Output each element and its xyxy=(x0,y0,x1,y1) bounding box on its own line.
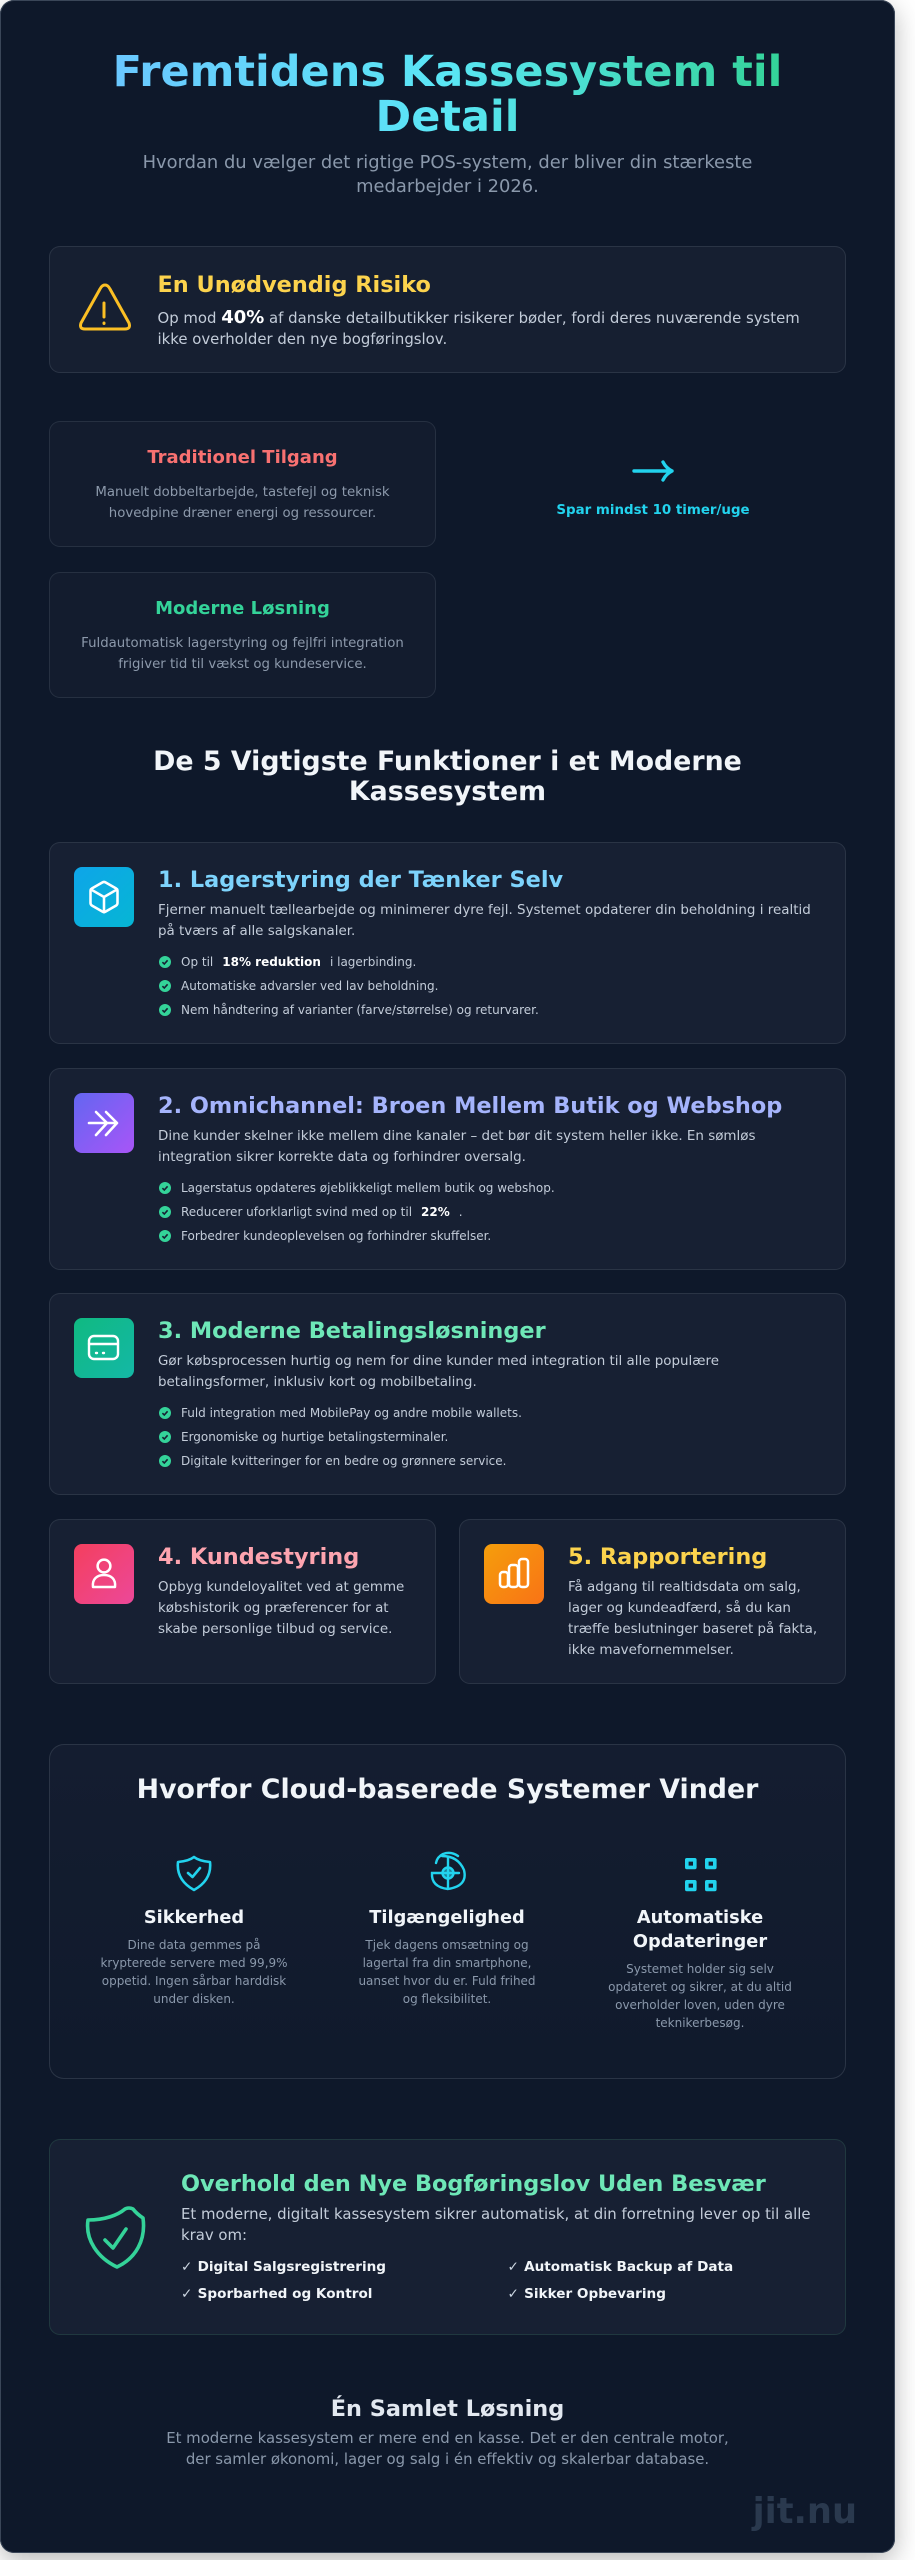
benefit: security text: krypterede servere med 99,9% xyxy=(100,1956,288,1970)
benefit: security text: Dine data gemmes på xyxy=(127,1938,261,1952)
list item: Nem håndtering af varianter (farve/størrelse) og returvarer. xyxy=(181,1003,539,1017)
conclusion text: Et moderne kassesystem er mere end en kasse. Det er den centrale motor, xyxy=(166,2429,729,2447)
benefit: security text: under disken. xyxy=(153,1992,235,2006)
text: Dine kunder skelner ikke mellem dine kanaler – det bør dit system heller ikke. En sømløs xyxy=(158,1129,755,1144)
benefit: security heading: Sikkerhed xyxy=(144,1907,244,1928)
title xyxy=(0,50,895,140)
checkmarks xyxy=(159,956,171,1016)
text xyxy=(158,1580,404,1637)
text: krav om: xyxy=(181,2226,247,2244)
panel: feature 3 xyxy=(49,1293,846,1495)
text: Fjerner manuelt tællearbejde og minimerer dyre fejl. Systemet opdaterer din beholdning i realtid xyxy=(158,903,811,918)
icon: grid xyxy=(685,1858,717,1892)
benefit: updates heading: Automatiske xyxy=(637,1907,763,1928)
subtitle xyxy=(143,152,752,197)
heading: Overhold den Nye Bogføringslov Uden Besvær xyxy=(181,2171,766,2197)
title: Fremtidens Kassesystem til xyxy=(113,47,782,97)
text: på tværs af alle salgskanaler. xyxy=(158,924,355,939)
checklist item: ✓ xyxy=(181,2259,192,2275)
benefit: availability text: og fleksibilitet. xyxy=(403,1992,491,2006)
icon: user xyxy=(74,1544,134,1604)
subtitle: medarbejder i 2026. xyxy=(356,176,539,197)
benefit: updates text: opdateret og sikrer, at du altid xyxy=(608,1980,792,1994)
conclusion heading: Én Samlet Løsning xyxy=(331,2396,564,2422)
checklist item: Digital Salgsregistrering xyxy=(198,2259,386,2275)
panel: traditional approach xyxy=(49,421,436,547)
subtitle: Hvordan du vælger det rigtige POS-system, der bliver din stærkeste xyxy=(143,152,752,173)
text: købshistorik og præferencer for at xyxy=(158,1601,389,1616)
text: Et moderne, digitalt kassesystem sikrer automatisk, at din forretning lever op til alle xyxy=(181,2205,810,2223)
benefit: updates text: Systemet holder sig selv xyxy=(626,1962,774,1976)
text: træffe beslutninger baseret på fakta, xyxy=(568,1622,817,1637)
checklist item: ✓ xyxy=(508,2259,519,2275)
benefit: availability heading: Tilgængelighed xyxy=(369,1907,525,1928)
benefit: updates text xyxy=(608,1962,792,2030)
watermark: jit.nu xyxy=(753,2491,857,2532)
risk text xyxy=(158,307,800,348)
text xyxy=(158,1354,719,1390)
text xyxy=(158,1129,755,1165)
conclusion text xyxy=(166,2429,729,2468)
panel: feature 2 xyxy=(49,1068,846,1270)
icon: remote access xyxy=(430,1852,466,1890)
text: ikke mavefornemmelser. xyxy=(568,1643,734,1658)
icon: box xyxy=(74,867,134,927)
list item: Automatiske advarsler ved lav beholdning. xyxy=(181,979,438,993)
benefit: updates heading xyxy=(633,1907,768,1952)
text: hovedpine dræner energi og ressourcer. xyxy=(109,506,376,521)
icon: shield xyxy=(176,1856,212,1892)
section heading xyxy=(153,746,742,807)
icon: payment card xyxy=(74,1318,134,1378)
text: skabe personlige tilbud og service. xyxy=(158,1622,392,1637)
heading: Hvorfor Cloud-baserede Systemer Vinder xyxy=(137,1774,758,1805)
text xyxy=(181,2205,810,2244)
text: Manuelt dobbeltarbejde, tastefejl og teknisk xyxy=(95,485,390,500)
benefit: availability text: uanset hvor du er. Fuld frihed xyxy=(358,1974,536,1988)
list item: Digitale kvitteringer for en bedre og grønnere service. xyxy=(181,1454,506,1468)
panel: feature 1 xyxy=(49,842,846,1044)
title: Detail xyxy=(376,92,519,142)
section heading: Kassesystem xyxy=(349,776,546,807)
benefit: availability text: Tjek dagens omsætning og xyxy=(365,1938,529,1952)
heading: 2. Omnichannel: Broen Mellem Butik og Webshop xyxy=(158,1093,782,1119)
benefit: security text xyxy=(100,1938,288,2006)
panel: compliance xyxy=(49,2139,846,2335)
heading: 1. Lagerstyring der Tænker Selv xyxy=(158,867,563,893)
list item: Forbedrer kundeoplevelsen og forhindrer skuffelser. xyxy=(181,1229,491,1243)
heading: Moderne Løsning xyxy=(155,598,330,619)
text: betalingsformer, inklusiv kort og mobilbetaling. xyxy=(158,1375,477,1390)
icon: arrows xyxy=(74,1093,134,1153)
icon: shield check xyxy=(86,2206,146,2269)
icon: warning xyxy=(79,284,131,330)
panel: modern solution xyxy=(49,572,436,698)
text: integration sikrer korrekte data og forhindrer oversalg. xyxy=(158,1150,526,1165)
benefit: updates text: teknikerbesøg. xyxy=(656,2016,744,2030)
checklist item: ✓ xyxy=(508,2286,519,2302)
text: Opbyg kundeloyalitet ved at gemme xyxy=(158,1580,404,1595)
checklist item: Sikker Opbevaring xyxy=(524,2286,666,2302)
checklist item: Sporbarhed og Kontrol xyxy=(198,2286,372,2302)
list item: Ergonomiske og hurtige betalingsterminaler. xyxy=(181,1430,448,1444)
heading: 4. Kundestyring xyxy=(158,1544,359,1570)
text: Få adgang til realtidsdata om salg, xyxy=(568,1580,801,1595)
list item: Lagerstatus opdateres øjeblikkeligt mellem butik og webshop. xyxy=(181,1181,555,1195)
conclusion text: der samler økonomi, lager og salg i én effektiv og skalerbar database. xyxy=(186,2450,709,2468)
panel: feature 4 xyxy=(49,1519,436,1684)
benefit: updates text: overholder loven, uden dyre xyxy=(615,1998,785,2012)
panel: risk xyxy=(49,246,846,373)
heading: 3. Moderne Betalingsløsninger xyxy=(158,1318,546,1344)
text: Gør købsprocessen hurtig og nem for dine kunder med integration til alle populære xyxy=(158,1354,719,1369)
text xyxy=(95,485,390,521)
text: frigiver tid til vækst og kundeservice. xyxy=(118,657,367,672)
benefit: availability text: lagertal fra din smartphone, xyxy=(363,1956,531,1970)
section heading: De 5 Vigtigste Funktioner i et Moderne xyxy=(153,746,742,777)
checklist item: ✓ xyxy=(181,2286,192,2302)
icon: bar chart xyxy=(484,1544,544,1604)
list item: Reducerer uforklarligt svind med op til . xyxy=(181,1205,463,1219)
list item: 18% reduktion xyxy=(222,955,321,969)
list item: 22% xyxy=(421,1205,450,1219)
checklist item: Automatisk Backup af Data xyxy=(524,2259,733,2275)
risk text: ikke overholder den nye bogføringslov. xyxy=(158,330,447,348)
benefit: security text: oppetid. Ingen sårbar harddisk xyxy=(102,1974,286,1988)
heading: Traditionel Tilgang xyxy=(147,447,338,468)
risk heading: En Unødvendig Risiko xyxy=(158,272,431,298)
text: Fuldautomatisk lagerstyring og fejlfri integration xyxy=(81,636,404,651)
text xyxy=(81,636,404,672)
panel: cloud benefits xyxy=(49,1744,846,2079)
benefit: updates heading: Opdateringer xyxy=(633,1931,767,1952)
callout: time saved: Spar mindst 10 timer/uge xyxy=(556,503,750,518)
list item: Op til i lagerbinding. xyxy=(181,955,416,969)
panel: feature 5 xyxy=(459,1519,846,1684)
heading: 5. Rapportering xyxy=(568,1544,767,1570)
text: lager og kundeadfærd, så du kan xyxy=(568,1601,791,1616)
checkmarks xyxy=(159,1182,171,1242)
text xyxy=(568,1579,817,1658)
arrow xyxy=(632,460,674,482)
text xyxy=(158,903,811,939)
risk text: Op mod 40% af danske detailbutikker risikerer bøder, fordi deres nuværende system xyxy=(158,307,800,328)
benefit: availability text xyxy=(358,1938,536,2006)
list item: Fuld integration med MobilePay og andre mobile wallets. xyxy=(181,1406,522,1420)
checkmarks xyxy=(159,1407,171,1467)
